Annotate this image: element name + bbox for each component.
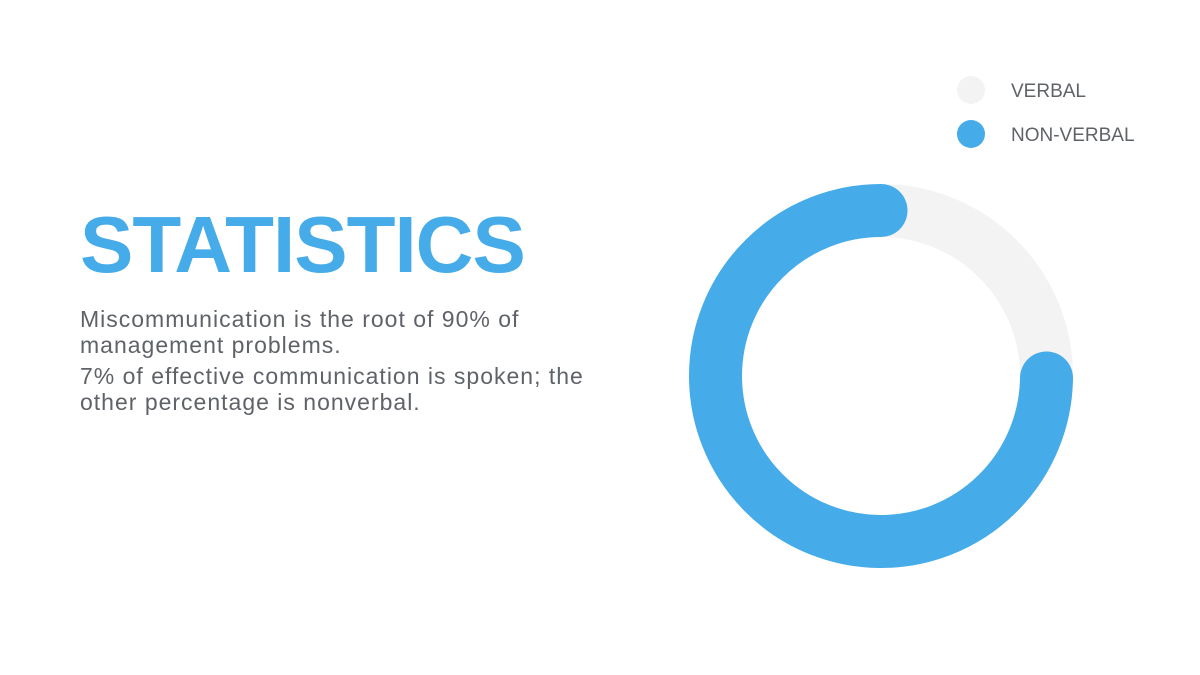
legend: non-verbal [957, 120, 1135, 148]
title: STATISTICS [80, 200, 525, 289]
legend: verbal [957, 76, 1086, 104]
text block: 7% of effective communication is spoken; the other percentage is nonverbal. [80, 363, 584, 415]
text block [80, 306, 584, 415]
legend: verbal: VERBAL [1011, 81, 1086, 102]
text block: Miscommunication is the root of 90% of management problems. [80, 306, 519, 358]
legend: non-verbal: NON-VERBAL [1011, 125, 1135, 146]
